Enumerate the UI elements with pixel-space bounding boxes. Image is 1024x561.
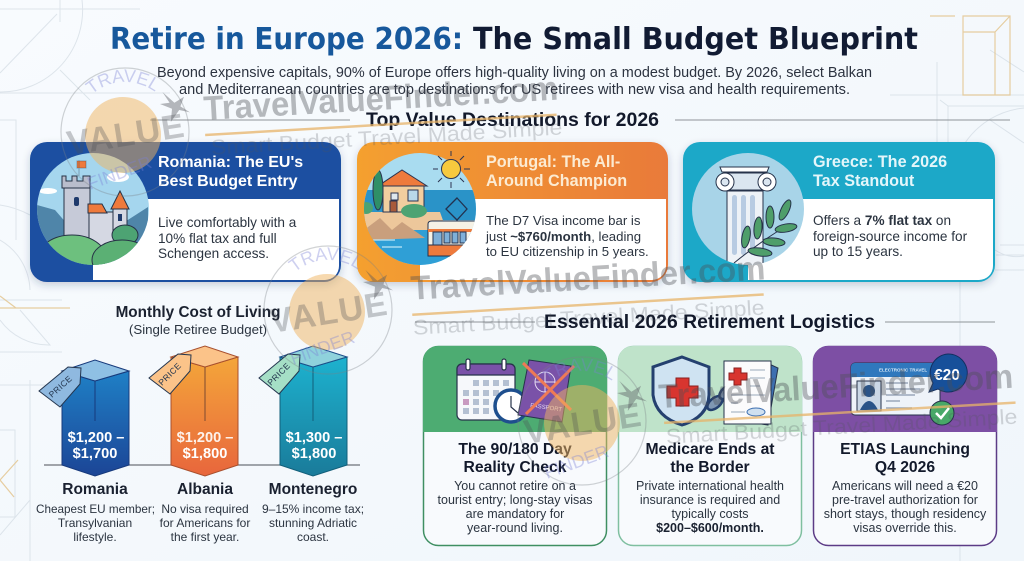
panel: Portugal card [357,142,668,282]
column text: Romania: lifestyle. [73,530,117,544]
watermark 2: Smart Budget Travel Made Simple [412,296,765,340]
card heading [840,441,970,476]
column text: Montenegro [262,481,364,544]
card heading: Q4 2026 [875,459,935,476]
bar: Montenegro: $1,300 – [286,430,342,446]
card body [813,213,968,259]
watermark 1: FINDER [85,152,154,194]
card heading: Greece: The 2026 [813,153,947,171]
card body [485,213,649,259]
card heading: Tax Standout [813,172,915,190]
card body: $200–$600/month. [656,521,764,535]
card heading: Romania: The EU's [158,154,303,171]
bar: Albania: $1,800 [183,446,227,462]
card body: tourist entry; long-stay visas [438,493,592,507]
icon: €20 bubble [929,354,967,392]
card body: year-round living. [467,521,563,535]
column text: Albania: the first year. [171,530,239,544]
watermark 1 [60,67,563,196]
card heading [486,153,627,190]
card body [824,479,987,535]
intro text: and Mediterranean countries are top destinations for US retirees with new visa and health requirements. [179,82,850,98]
bar: Romania: $1,200 – [68,430,124,446]
watermark 2 [264,245,766,374]
card heading: ETIAS Launching [840,441,970,458]
column text: Albania: Albania [177,481,233,498]
card body: are mandatory for [466,507,564,521]
card body: pre-travel authorization for [832,493,978,507]
card heading [645,441,775,476]
panel: Romania card [30,142,341,282]
card body [158,215,297,261]
card heading: the Border [670,459,750,476]
column text: Albania [160,481,250,544]
card heading [458,441,572,476]
watermark 3: Smart Budget Travel Made Simple [665,406,1018,449]
card heading: Best Budget Entry [158,173,298,190]
column text: Montenegro: stunning Adriatic [269,516,357,530]
chart heading: (Single Retiree Budget) [129,322,267,337]
card body: up to 15 years. [813,244,903,259]
card heading: Medicare Ends at [645,441,775,458]
panel: Medicare card [618,346,802,546]
column text: Montenegro: coast. [297,530,329,544]
icon: travel authorisation card [851,363,940,415]
card body: foreign-source income for [813,229,968,244]
card body: Private international health [636,479,784,493]
card body: to EU citizenship in 5 years. [486,244,649,259]
icon: shield [653,357,709,425]
card body: Americans will need a €20 [832,479,978,493]
watermark 2: VALUE [267,285,390,341]
bar: Romania: $1,700 [73,446,117,462]
icon: travel authorisation card: ELECTRONIC TRAVEL [879,368,927,372]
column text: Montenegro: 9–15% income tax; [262,502,364,516]
icon: green check [930,401,954,425]
bar: Romania [39,360,129,476]
watermark 1: TravelValueFinder.com [203,70,559,128]
heading: top value destinations: Top Value Destinations for 2026 [366,110,659,131]
card body: Offers a 7% flat tax on [813,213,951,228]
column text: Romania: Romania [62,481,128,498]
icon: document [724,361,778,425]
watermark 1: VALUE [64,107,187,163]
icon: house, sun and tram [359,153,480,265]
panel: ETIAS card [813,346,997,546]
title: The Small Budget Blueprint [473,22,918,57]
watermark 3 [518,356,1018,486]
icon: sun [433,151,470,188]
card body: short stays, though residency [824,507,987,521]
card heading: Around Champion [486,172,627,190]
watermark 3: FINDER [542,441,611,483]
card body: insurance is required and [640,493,780,507]
bar: Montenegro: $1,800 [292,446,336,462]
card heading [158,154,303,190]
icon: castle [37,153,149,265]
column text: Romania: Transylvanian [58,516,132,530]
card heading: Reality Check [464,459,567,476]
bar: Albania: $1,200 – [177,430,233,446]
card heading [813,153,947,190]
bar: Montenegro [259,346,347,476]
watermark 3: VALUE [521,396,644,452]
chart heading: Monthly Cost of Living [116,304,280,321]
card body: visas override this. [853,521,957,535]
bar chart: monthly cost [39,346,360,476]
card body: Schengen access. [158,246,269,261]
watermark 2: TRAVEL [288,247,359,270]
watermark 1: TRAVEL [84,69,156,92]
card body: just ~$760/month, leading [485,229,641,244]
icon: €20 bubble: €20 [934,367,960,384]
card body: Live comfortably with a [158,215,297,230]
card body [438,479,592,535]
column text: Romania [36,481,155,544]
intro text: Beyond expensive capitals, 90% of Europe offers high-quality living on a modest budget. By 2026, select Balkan [157,65,872,81]
column text: Albania: No visa required [161,502,249,516]
bar: Montenegro: PRICE [265,361,292,387]
icon: crossed passport: PASSPORT [530,403,563,413]
card body [636,479,784,535]
watermark 1: Smart Budget Travel Made Simple [210,116,563,160]
panel: 90/180 card [423,346,607,546]
card body: typically costs [671,507,749,521]
watermark 3: TravelValueFinder.com [658,358,1014,416]
title [110,22,918,57]
column text: Albania: for Americans for [160,516,250,530]
chart heading [116,304,280,337]
intro text [157,65,872,98]
icon: column and olive branch [727,191,763,266]
bar: Albania [149,346,238,476]
column text: Romania: Cheapest EU member; [36,502,155,516]
card body: The D7 Visa income bar is [486,213,641,228]
card heading: Portugal: The All- [486,153,620,171]
column text: Montenegro: Montenegro [269,481,357,498]
icon: broken chain [705,382,737,413]
icon: calendar and clock [457,359,527,422]
watermark 2: TravelValueFinder.com [410,249,766,308]
bar: Romania: PRICE [47,373,74,399]
bar: Albania: PRICE [156,361,183,387]
watermark 3: TRAVEL [542,358,613,380]
card body: 10% flat tax and full [158,231,277,246]
card heading: The 90/180 Day [458,441,572,458]
card body: You cannot retire on a [454,479,576,493]
icon: crossed passport [518,360,574,422]
title: Retire in Europe 2026: [110,22,463,57]
heading: logistics: Essential 2026 Retirement Logistics [544,312,875,333]
panel: Greece card [683,142,995,282]
watermark 2: FINDER [288,327,357,369]
